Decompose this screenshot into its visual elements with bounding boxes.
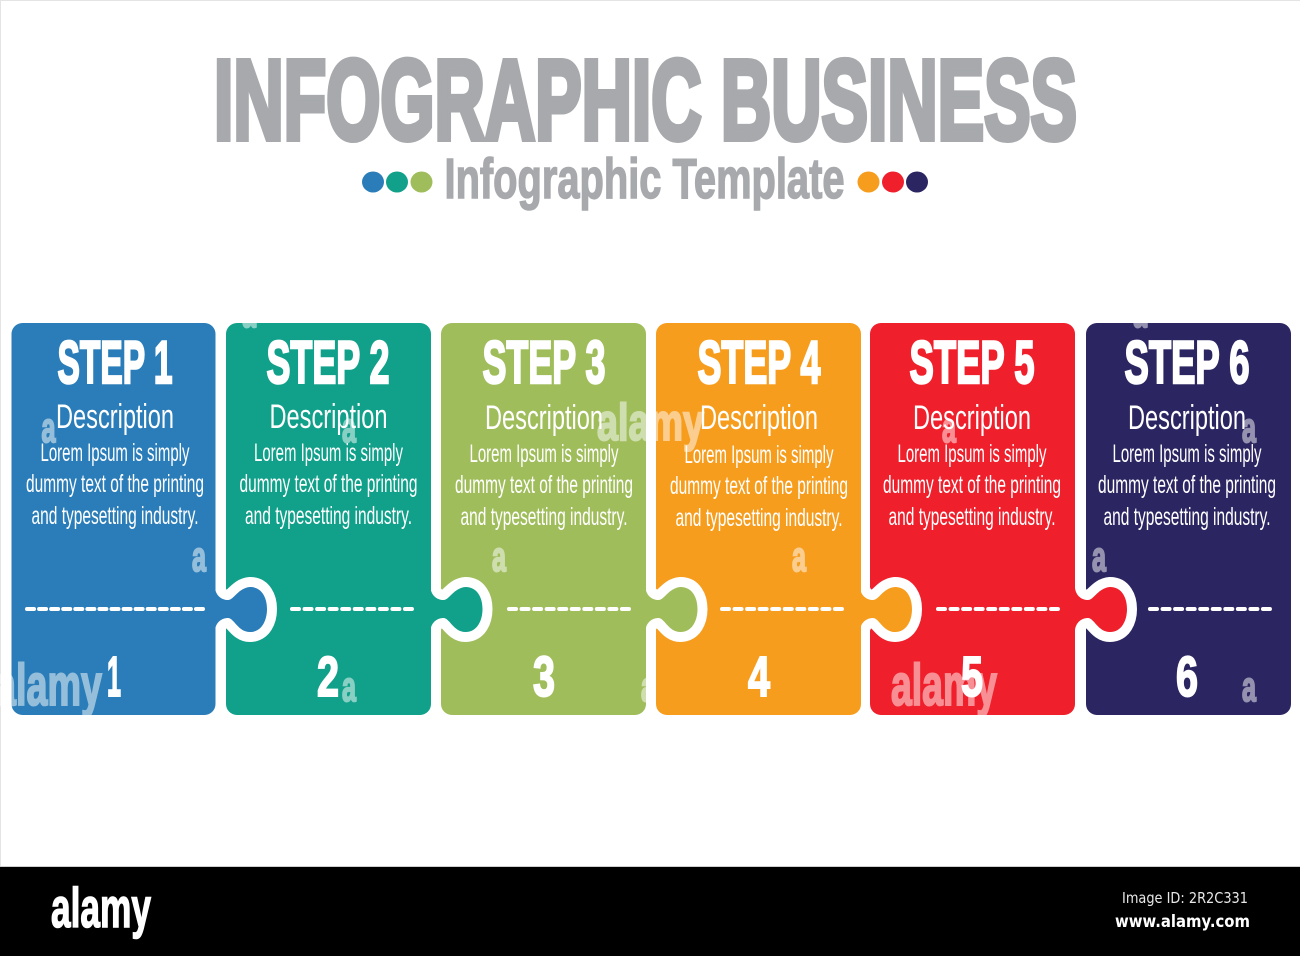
panel: step 6 [1086,323,1291,715]
step 2 description heading: Description [270,398,388,436]
puzzle connector 5 to 6 [1073,587,1127,632]
step 4 body text: and typesetting industry. [676,504,842,532]
step 1 description heading: Description [56,398,174,436]
step 5 heading: STEP 5 [910,329,1034,396]
step 5 body text: and typesetting industry. [888,503,1056,531]
step 5 body text: dummy text of the printing [883,471,1061,499]
step 3 body text [455,440,633,531]
step 3 number: 3 [533,645,555,709]
step 4 body text: dummy text of the printing [670,472,848,500]
step 2 body text [240,439,418,530]
step 2 body text: dummy text of the printing [240,470,418,498]
step 1 body text [26,439,204,530]
watermarks: a [1242,404,1256,451]
puzzle connector 2 to 3 [428,587,482,632]
step 5 description heading: Description [913,399,1031,437]
step 5 number: 5 [961,645,983,709]
watermarks: a [641,663,655,710]
step 2 body text: and typesetting industry. [245,502,412,530]
step 1 heading: STEP 1 [58,329,172,396]
step 3 body text: dummy text of the printing [455,471,633,499]
step 3 body text: and typesetting industry. [460,503,628,531]
step 4 body text [670,441,848,532]
puzzle connector 1 to 2 [213,587,267,632]
panel: step 1: 1 [107,645,121,709]
image id: Image ID: 2R2C331 [1122,889,1248,907]
step 5 body text [883,440,1061,531]
left coloured dots [362,172,432,192]
step 3 body text: Lorem Ipsum is simply [470,440,619,468]
website: www.alamy.com [1115,912,1250,931]
step 4 number: 4 [748,645,770,709]
panel: step 3 [441,323,698,715]
step 1 body text: and typesetting industry. [32,502,198,530]
header [214,37,1077,211]
step 3 heading: STEP 3 [482,329,606,396]
puzzle connector 3 to 4 [644,587,698,632]
panel: step 1 [12,323,267,715]
right coloured dots [858,172,928,192]
step 4 heading: STEP 4 [698,329,821,396]
watermarks: a [42,404,56,451]
watermarks: a [192,533,206,580]
step 2 number: 2 [317,645,339,709]
panel: step 2 [226,323,482,715]
step 5 body text: Lorem Ipsum is simply [898,440,1047,468]
step 1 body text: Lorem Ipsum is simply [40,439,190,467]
watermarks: a [492,533,506,580]
footer bar [0,866,1300,956]
watermarks: a [792,533,806,580]
watermarks: a [942,404,956,451]
panel: step 5 [870,323,1127,715]
step 4 description heading: Description [700,399,818,437]
watermarks [0,289,1256,718]
panel: step 4 [656,323,912,715]
watermarks: a [1242,663,1256,710]
watermarks: alamy [891,653,997,718]
watermarks: a [342,663,356,710]
step 6 number: 6 [1176,645,1198,709]
step 6 body text [1098,440,1276,531]
step 6 description heading: Description [1128,399,1246,437]
subtitle: Infographic Template [444,147,844,211]
watermarks: a [342,404,356,451]
watermarks: a [1092,533,1106,580]
footer logo: alamy [51,876,151,939]
step 3 description heading: Description [485,399,603,437]
watermarks: a [242,289,256,336]
step 1 body text: dummy text of the printing [26,470,204,498]
step 2 body text: Lorem Ipsum is simply [254,439,403,467]
step 4 body text: Lorem Ipsum is simply [684,441,834,469]
watermarks: alamy [597,394,704,452]
watermarks: a [1133,289,1147,336]
puzzle connector 4 to 5 [858,587,912,632]
step 2 heading: STEP 2 [266,329,390,396]
